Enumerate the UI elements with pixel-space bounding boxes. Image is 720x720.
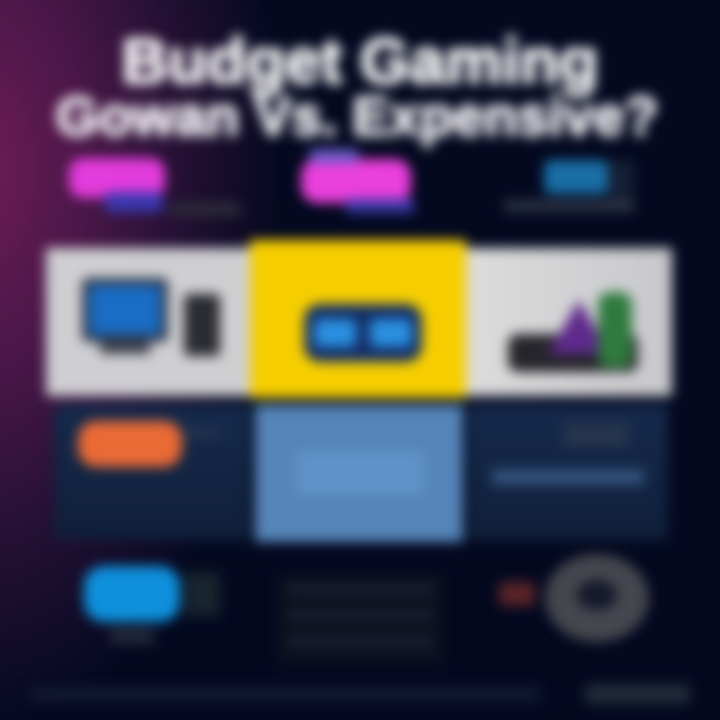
icon: grey headset — [492, 548, 655, 648]
column 3 header icon — [501, 151, 638, 217]
panel: yellow centre — [250, 240, 466, 398]
title: Gowan Vs. Expensive? — [56, 85, 658, 147]
icon: gaming monitor and tower — [72, 268, 230, 366]
column 1 header icon — [60, 148, 242, 220]
text lines — [492, 469, 644, 485]
text lines — [184, 429, 220, 437]
icon: blue monitor — [74, 556, 223, 648]
panel: dark right — [468, 405, 668, 540]
panel: light right — [466, 248, 672, 396]
panel: dark left — [54, 405, 250, 540]
icon: orange badge — [78, 421, 182, 467]
footer text — [30, 686, 540, 702]
footer logo — [585, 684, 690, 704]
text lines — [295, 451, 425, 495]
text block: centre list — [278, 575, 443, 663]
title: Budget Gaming — [122, 25, 598, 97]
title — [48, 25, 665, 156]
column 2 header icon — [291, 139, 422, 222]
panel: light left — [46, 248, 250, 396]
icon: blue console — [304, 304, 422, 362]
panel: blue centre — [255, 405, 463, 542]
icon: purple and green gaming rig — [498, 283, 648, 382]
